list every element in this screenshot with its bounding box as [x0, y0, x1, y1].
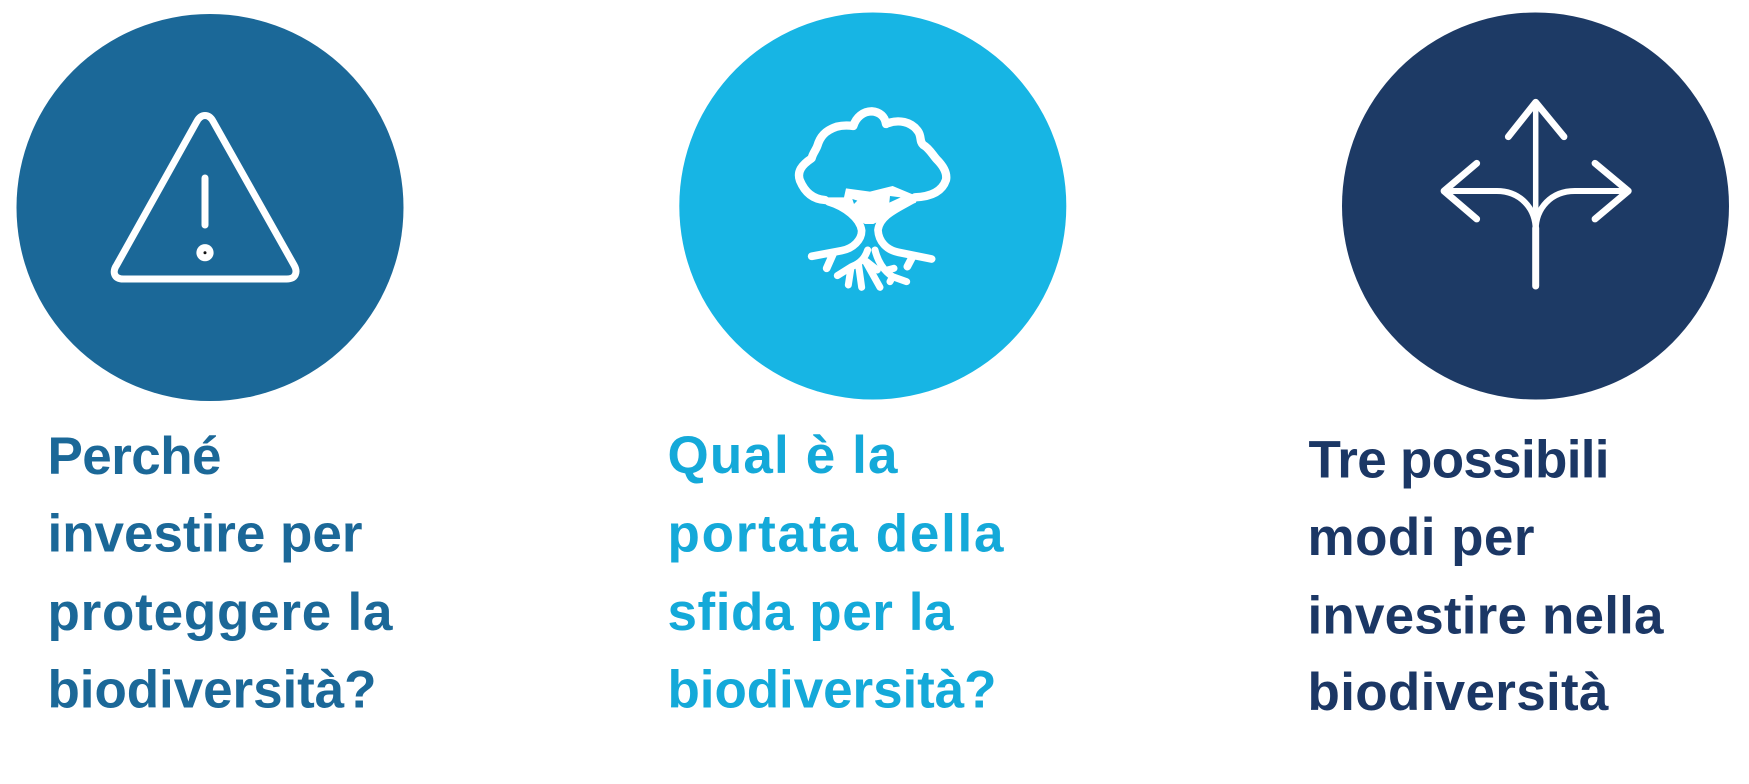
heading: portata della sfida: sfida per la [668, 583, 954, 642]
heading: tre modi: investire nella [1308, 586, 1664, 646]
tree roots [837, 250, 907, 287]
trunk holes [852, 196, 901, 204]
heading: perché investire [48, 427, 393, 720]
panel: tre modi [1308, 12, 1729, 722]
heading: portata della sfida: Qual è la [668, 426, 898, 485]
icon: warning triangle [114, 116, 296, 279]
icon: three way arrows [1444, 102, 1628, 286]
heading: tre modi [1308, 430, 1664, 722]
heading: tre modi: Tre possibili [1308, 430, 1610, 490]
panel: portata della sfida [668, 12, 1066, 720]
heading: perché investire: Perché [48, 427, 222, 486]
heading: portata della sfida: biodiversità? [668, 660, 996, 720]
circle: navy [1342, 12, 1729, 400]
tree trunk [825, 186, 917, 224]
icon: tree with roots [799, 111, 946, 287]
heading: tre modi: modi per [1308, 508, 1534, 567]
heading: perché investire: biodiversità? [48, 660, 376, 720]
heading: portata della sfida [668, 426, 1004, 720]
circle: mid blue [16, 14, 404, 401]
heading: perché investire: investire per [48, 504, 362, 564]
heading: tre modi: biodiversità [1308, 663, 1609, 722]
heading: portata della sfida: portata della [668, 504, 1004, 564]
tree crown [799, 111, 946, 200]
panel: perché investire [16, 14, 404, 720]
circle: light blue [679, 12, 1066, 400]
heading: perché investire: proteggere la [48, 583, 393, 642]
